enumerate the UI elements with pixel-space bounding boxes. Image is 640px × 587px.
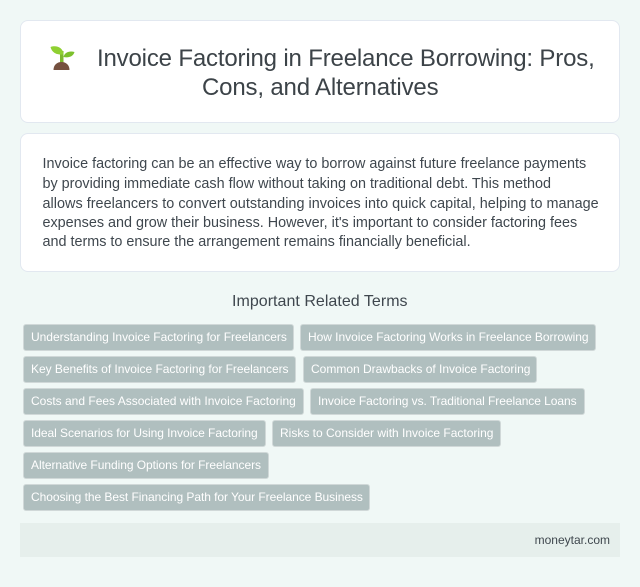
- chip: Ideal Scenarios for Using Invoice Factoring: [31, 426, 258, 440]
- chip: [303, 356, 537, 383]
- footer source: moneytar.com: [535, 533, 610, 547]
- chip: Alternative Funding Options for Freelancers: [31, 458, 261, 472]
- text block: summary: [42, 156, 599, 250]
- term chips: [23, 324, 596, 511]
- panel: title card: [20, 20, 620, 123]
- panel: summary card: [20, 133, 620, 272]
- footer bar: [20, 523, 620, 557]
- title: [97, 45, 595, 101]
- text block: summary: and terms to ensure the arrangement remains financially beneficial.: [42, 234, 471, 250]
- chip: Choosing the Best Financing Path for Your Freelance Business: [31, 490, 363, 504]
- text block: summary: by providing immediate cash flow without taking on traditional debt. This method: [42, 176, 551, 192]
- chip: [272, 420, 501, 447]
- text block: summary: expenses and grow their business. However, it's important to consider factoring fees: [42, 215, 577, 231]
- chip: [310, 388, 585, 415]
- chip: [23, 324, 294, 351]
- text block: summary: allows freelancers to convert outstanding invoices into quick capital, helping to manage: [42, 196, 599, 212]
- chip: [23, 484, 370, 511]
- icon: seedling: [50, 46, 74, 70]
- chip: Costs and Fees Associated with Invoice Factoring: [31, 394, 296, 408]
- chip: [23, 388, 304, 415]
- chip: [23, 356, 296, 383]
- title: Cons, and Alternatives: [202, 74, 438, 101]
- chip: Common Drawbacks of Invoice Factoring: [311, 362, 530, 376]
- heading: related terms: Important Related Terms: [232, 293, 408, 310]
- chip: [23, 452, 269, 479]
- chip: How Invoice Factoring Works in Freelance Borrowing: [308, 330, 589, 344]
- title: Invoice Factoring in Freelance Borrowing: Pros,: [97, 45, 595, 72]
- chip: [23, 420, 266, 447]
- chip: Understanding Invoice Factoring for Freelancers: [31, 330, 287, 344]
- chip: Key Benefits of Invoice Factoring for Freelancers: [31, 362, 288, 376]
- chip: Risks to Consider with Invoice Factoring: [280, 426, 493, 440]
- chip: Invoice Factoring vs. Traditional Freelance Loans: [318, 394, 577, 408]
- text block: summary: Invoice factoring can be an effective way to borrow against future freelance payments: [42, 156, 586, 172]
- chip: [300, 324, 596, 351]
